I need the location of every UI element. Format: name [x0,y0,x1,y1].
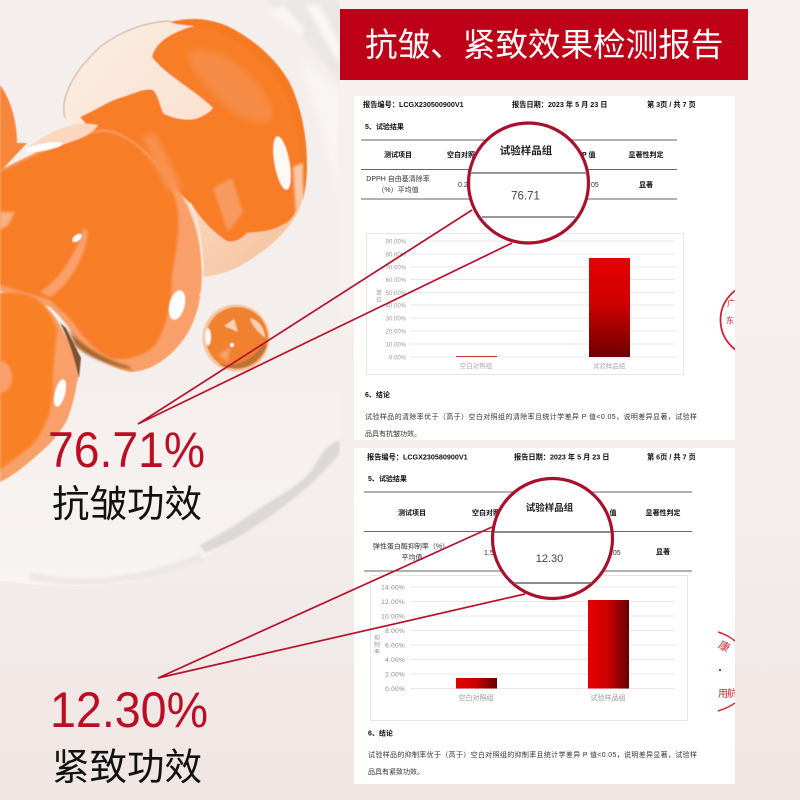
callout lines 2 [158,527,525,678]
report 1 [354,96,735,440]
report 1 bar chart: 单 [376,289,382,297]
report 1 table: 0.2 [458,182,468,189]
report 1 header line [363,100,696,109]
stamp 2: 用 [718,689,728,700]
report 1 bar chart: 0.00% [389,356,407,362]
magnifier 1 value: 76.71 [511,190,540,202]
report 2 bar chart: 空白对照组 [458,693,494,702]
report 1 header line: 报告日期：2023 年 5 月 23 日 [512,100,607,109]
report 2 bar chart: 4.00% [385,657,405,664]
callout lines 1 [138,210,512,424]
report 2 bar chart: 8.00% [385,628,405,635]
report 1 conclusion: 6、结论 [365,390,390,399]
report 2 table: 显著 [656,547,670,556]
label: 紧致功效: 紧致功效 [52,746,202,788]
report 2 bar chart: 2.00% [385,672,405,678]
report 1 bar chart: 90.00% [386,240,407,246]
report 1 table: P 值 [582,150,596,159]
title text: 抗皱、紧致效果检测报告 [365,26,723,63]
report 2 conclusion: 品具有紧致功效。 [368,767,424,776]
report 2 table: 空白对照 [472,508,500,517]
report 1 bar chart: 20.00% [386,330,407,336]
bubble: small glint [72,232,82,244]
bubble: lower left halo [0,293,78,482]
report 2 table: 显著性判定 [646,508,680,517]
report 1 bar chart: 50.00% [386,291,407,297]
report 2 [354,448,737,784]
report 2 table: 测试项目 [398,508,426,517]
report 1 header line: 第 3页 / 共 7 页 [647,100,696,109]
report 2 table: 弹性蛋白酶抑制率（%） [373,542,449,550]
report 1 table: 显著 [639,180,653,189]
report 1 bar chart: 60.00% [386,278,407,284]
report 2 bar chart: 率 [374,648,380,656]
report 2 bar chart: 12.00% [381,599,405,606]
stat: 12.30%: 12.30% [50,682,208,738]
report 1 table: DPPH 自由基清除率 [366,174,430,183]
report 1 bar chart [366,234,684,374]
report 1 conclusion: 试验样品的清除率优于（高于）空白对照组的清除率且统计学差异 P 值<0.05，说明差异显著，试验样 [365,412,697,421]
report 1 bar chart: 40.00% [386,304,407,310]
report 2 bar chart: 0.00% [385,686,405,693]
report 2 conclusion: 6、结论 [368,728,393,738]
bubble: upper clear shell [64,19,307,277]
report 1 bar chart: 空白对照组 [460,361,493,370]
stat: 76.71%: 76.71% [48,422,205,478]
bubble: central upper soft streak [142,133,183,192]
bubble: upper inner lighter patch [189,49,272,123]
magnifier 2 [492,478,612,598]
report 2 header line: 报告编号：LCGX230580900V1 [367,452,468,462]
report 1 table: 显著性判定 [628,150,664,159]
bubble: lower left core [0,293,57,470]
title banner [340,9,748,80]
bubble: central halo [0,129,202,372]
report 2 bar chart: 制 [374,641,380,649]
report 1 table: 空白对照 [447,150,475,159]
report 1 bar chart: 10.00% [386,342,407,348]
report 2 table: 1.5 [484,550,494,557]
bubble: top left [0,85,27,172]
report 1 bar chart: 位 [376,296,382,304]
stamp 1: 广 [727,298,735,308]
illustration: glass dish with orange serum bubbles [0,0,340,586]
bubble: upper lens highlight [30,123,98,148]
bubble: clear shell rim line [64,21,170,118]
report 1 conclusion: 品具有抗皱功效。 [365,429,421,438]
report 2 header line [367,452,696,462]
stamp 2 [718,631,735,712]
bubble: dark seam [60,323,81,378]
bubbles group [0,19,307,482]
report 2 table: 0.05 [607,550,621,557]
report 1 header line: 报告编号：LCGX230500900V1 [363,100,464,109]
stamp 2: 航 [727,687,737,700]
stamp 1 [720,290,735,350]
report 2 table: 平均值 [402,552,422,562]
bubble: streak over seam [213,178,243,232]
report 1 table: 05 [591,182,599,189]
report 2 bar chart: 10.00% [381,614,405,620]
report 2 header line: 报告日期：2023 年 5 月 23 日 [514,452,609,462]
bubble: outer orange top rim [170,19,307,200]
report 2 conclusion: 试验样品的抑制率优于（高于）空白对照组的抑制率且统计学差异 P 值<0.05，说明差异显著，试验样 [368,750,697,759]
report 1 bar chart: 70.00% [386,266,407,272]
report 2 bar chart: 试验样品组 [590,693,626,702]
magnifier 2 heading: 试验样品组 [526,502,574,514]
report 2 section heading: 5、试验结果 [368,474,407,483]
magnifier 1 [468,123,588,243]
report 1 table: 测试项目 [384,150,412,159]
report 1 bar chart: 试验样品组 [593,361,626,370]
report 1 bar chart: 30.00% [386,316,407,322]
report 2 bar chart: 抑 [374,634,380,642]
magnifier 1 heading: 试验样品组 [500,144,553,157]
report 2 table: P 值 [603,508,616,517]
report 2 bar chart [370,576,688,720]
label: 抗皱功效: 抗皱功效 [52,483,202,525]
dish [0,0,340,586]
bubble: lower left highlight [53,378,67,408]
report 1 conclusion [365,390,697,438]
stamp 2: 康 [716,637,733,655]
report 1 table: （%）平均值 [377,185,419,194]
bubble: left soft patch [0,212,15,230]
report 2 conclusion [368,728,697,776]
bubble: central core [0,132,178,359]
bubble: central highlight [168,290,186,320]
bubble: small droplet [202,304,270,372]
bubble: upper highlight [272,136,292,190]
report 1 section heading: 5、试验结果 [365,122,404,131]
report 1 table [361,140,677,199]
stamp 1: 东 [726,315,734,325]
bubble: upper orange body [80,26,304,242]
report 2 bar chart: 14.00% [381,584,405,592]
bubble: central right thin glint [190,203,203,296]
report 2 header line: 第 6页 / 共 7 页 [647,452,696,462]
magnifier 2 value: 12.30 [536,553,563,565]
report 2 table [364,492,692,571]
report 1 bar chart: 80.00% [386,252,407,258]
bubble: left inner band [40,228,88,297]
report 2 bar chart: 6.00% [385,642,405,650]
bubble: lower left soft patch [0,361,12,393]
